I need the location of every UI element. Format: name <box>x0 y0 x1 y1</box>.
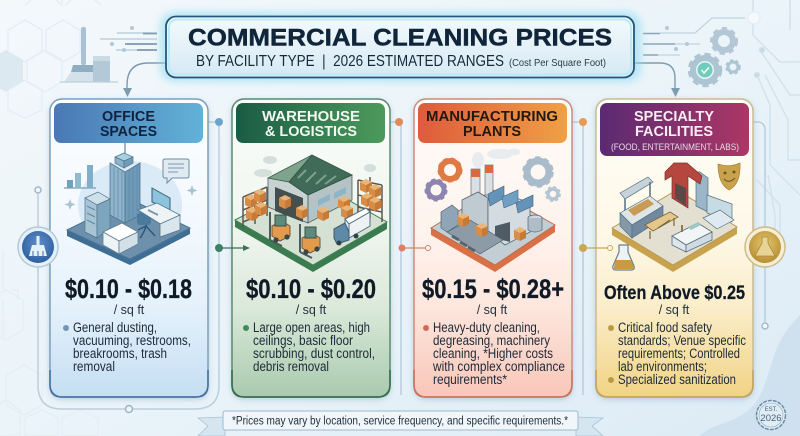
header band: warehouse: & LOGISTICS <box>265 124 357 140</box>
bullet text: warehouse: Large open areas, high <box>253 320 370 335</box>
header band: specialty <box>600 103 749 156</box>
connector loop: office card <box>35 122 219 412</box>
header band: office: OFFICE <box>102 109 155 125</box>
header band: warehouse <box>236 103 385 143</box>
background hexagon pattern <box>0 0 101 436</box>
bullet text: specialty: lab environments; <box>618 359 707 374</box>
badge: broom <box>18 227 58 267</box>
bullet text: specialty: standards; Venue specific <box>618 333 746 348</box>
node: top connector warehouse <box>395 118 403 126</box>
subtitle unit note: (Cost Per Square Foot) <box>509 57 606 69</box>
decorative wave, bottom right <box>700 315 800 436</box>
panel: warehouse and logistics <box>232 99 390 397</box>
subtitle: BY FACILITY TYPE | 2026 ESTIMATED RANGES <box>196 53 504 70</box>
bullet text: office: breakrooms, trash <box>73 346 167 361</box>
bullet text: warehouse <box>243 320 375 374</box>
icon: gears with check <box>643 18 745 85</box>
panel: specialty facilities <box>596 99 753 397</box>
header band: manufacturing: MANUFACTURING <box>426 109 558 125</box>
bullet text: office: General dusting, <box>73 320 157 335</box>
connectors between cards <box>390 122 768 395</box>
bullet text: manufacturing: with complex compliance <box>432 359 565 374</box>
seal: est. 2026: 2026 <box>760 413 782 424</box>
icon: flask <box>613 245 634 270</box>
header band: office <box>54 103 203 143</box>
arrow: office to warehouse <box>215 244 250 252</box>
note banner <box>223 411 578 430</box>
price: warehouse: $0.10 - $0.20 <box>246 274 376 304</box>
seal: est. 2026 <box>756 400 786 430</box>
header band: office: SPACES <box>100 124 157 140</box>
panel: office spaces <box>50 99 208 397</box>
bullet text: warehouse: ceilings, basic floor <box>253 333 353 348</box>
bullet text: warehouse: scrubbing, dust control, <box>253 346 375 361</box>
illustration: specialty <box>612 163 740 272</box>
connector: manufacturing to specialty <box>579 244 612 252</box>
seal: est. 2026: EST. <box>765 407 778 413</box>
unit: specialty: / sq ft <box>659 303 690 317</box>
panel: manufacturing plants <box>414 99 572 397</box>
price: specialty: Often Above $0.25 <box>604 282 745 304</box>
bullet text: manufacturing: Heavy-duty cleaning, <box>433 320 540 335</box>
connector: warehouse to manufacturing <box>398 244 430 252</box>
illustration: office <box>64 143 198 265</box>
header band: warehouse: WAREHOUSE <box>262 109 360 125</box>
unit: warehouse: / sq ft <box>296 303 327 317</box>
illustration: warehouse <box>235 155 387 272</box>
header band: specialty: SPECIALTY <box>634 109 714 125</box>
header band: manufacturing <box>418 103 567 143</box>
bullet text: office: vacuuming, restrooms, <box>73 333 191 348</box>
unit: office: / sq ft <box>114 303 145 317</box>
price: office: $0.10 - $0.18 <box>65 274 192 304</box>
bullet text: manufacturing: degreasing, machinery <box>433 333 550 348</box>
icon: broom and bucket <box>60 26 157 82</box>
bullet text: office <box>63 320 191 374</box>
title panel <box>160 12 641 82</box>
price: manufacturing: $0.15 - $0.28+ <box>422 274 564 304</box>
arrow: title to office card <box>123 63 166 97</box>
header band: specialty: FACILITIES <box>635 124 713 140</box>
header band: specialty: (FOOD, ENTERTAINMENT, LABS) <box>611 142 739 153</box>
background circuit lines <box>748 0 800 420</box>
bullet text: warehouse: debris removal <box>253 359 329 374</box>
bullet text: specialty: Critical food safety <box>618 320 712 335</box>
bullet text: specialty: requirements; Controlled <box>618 346 740 361</box>
bullet text: manufacturing <box>423 320 565 387</box>
badge: flask <box>745 227 785 267</box>
bullet text: office: removal <box>73 359 115 374</box>
header band: manufacturing: PLANTS <box>463 124 521 140</box>
unit: manufacturing: / sq ft <box>477 303 508 317</box>
note ribbon ends <box>198 417 603 436</box>
illustration: manufacturing <box>426 148 560 272</box>
node: top connector office <box>215 118 223 126</box>
note banner: *Prices may vary by location, service frequency, and specific requirements.* <box>232 416 568 428</box>
main title: COMMERCIAL CLEANING PRICES <box>188 24 612 52</box>
arrow: title to specialty card <box>635 63 680 97</box>
node: top connector manufacturing <box>579 118 587 126</box>
bullet text: manufacturing: requirements* <box>433 372 508 387</box>
bullet text: specialty <box>608 320 746 387</box>
bullet text: specialty: Specialized sanitization <box>618 372 736 387</box>
bullet text: manufacturing: cleaning, *Higher costs <box>433 346 553 361</box>
